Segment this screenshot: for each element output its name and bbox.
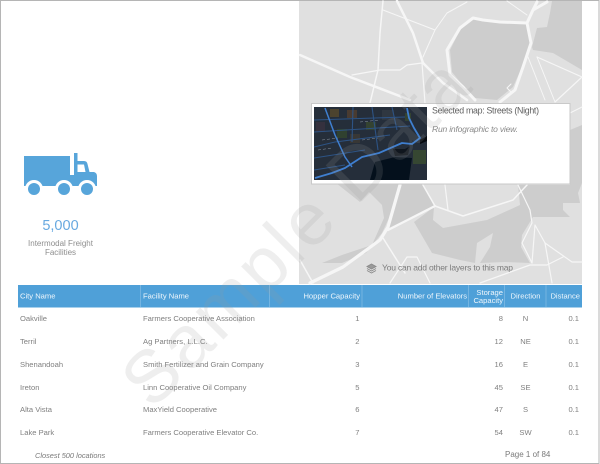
map background — [299, 1, 582, 284]
table row: Alta Vista: MaxYield Cooperative — [143, 405, 217, 414]
table row: Lake Park: Farmers Cooperative Elevator Co. — [143, 428, 258, 437]
stat label: Facilities — [45, 248, 76, 257]
table row: Ireton — [20, 383, 579, 392]
table row: Alta Vista: S — [523, 405, 528, 414]
table row: Ireton: SE — [520, 383, 531, 392]
table row: Oakville: Farmers Cooperative Association — [143, 314, 255, 323]
table row: Alta Vista: 47 — [495, 405, 503, 414]
table header: Facility Name — [143, 292, 189, 300]
stat value: 5,000 — [42, 218, 79, 234]
table row: Oakville: 8 — [499, 314, 503, 323]
table row: Alta Vista: Alta Vista — [20, 405, 53, 414]
table header: Distance — [550, 292, 580, 300]
table row: Lake Park — [20, 428, 579, 437]
selected map card: Selected map: Streets (Night) — [432, 106, 539, 116]
table row: Terril: Ag Partners, L.L.C. — [143, 337, 208, 346]
table row: Shenandoah: 3 — [355, 360, 360, 369]
table row: Oakville: Oakville — [20, 314, 47, 323]
table row: Shenandoah: 16 — [495, 360, 503, 369]
table row: Ireton: Ireton — [20, 383, 39, 392]
table row: Terril — [20, 337, 579, 346]
icon: truck — [24, 153, 97, 198]
table row: Shenandoah: E — [523, 360, 528, 369]
table row: Terril: 0.1 — [568, 337, 579, 346]
table row: Terril: 2 — [355, 337, 360, 346]
table row: Terril: 12 — [495, 337, 503, 346]
table row: Terril: NE — [520, 337, 531, 346]
table row: Ireton: 45 — [495, 383, 503, 392]
table row: Ireton: 5 — [355, 383, 360, 392]
selected map card — [312, 104, 570, 184]
watermark: Sample Data — [105, 41, 486, 422]
map layers note: You can add other layers to this map — [382, 262, 513, 272]
selected map card: Run infographic to view. — [432, 124, 518, 134]
table row: Oakville: N — [523, 314, 528, 323]
table header: Hopper Capacity — [303, 292, 360, 300]
map thumbnail — [314, 107, 427, 180]
table row: Alta Vista: 0.1 — [568, 405, 579, 414]
table row: Lake Park: Lake Park — [20, 428, 54, 437]
table header — [18, 285, 582, 308]
table row: Lake Park: 7 — [355, 428, 360, 437]
table footer note: Closest 500 locations — [35, 451, 106, 460]
table row: Oakville: 1 — [355, 314, 360, 323]
table row: Alta Vista: 6 — [355, 405, 360, 414]
table row: Oakville: 0.1 — [568, 314, 579, 323]
table row: Terril: Terril — [20, 337, 37, 346]
table row: Lake Park: 54 — [495, 428, 503, 437]
table header: Direction — [511, 292, 540, 300]
table header: City Name — [20, 292, 55, 300]
pagination: Page 1 of 84 — [505, 450, 551, 459]
table row: Shenandoah — [20, 360, 579, 369]
table row: Shenandoah: 0.1 — [568, 360, 579, 369]
table header: Number of Elevators — [398, 292, 467, 300]
table row: Ireton: 0.1 — [568, 383, 579, 392]
table header: Storage — [476, 288, 503, 297]
table row: Lake Park: 0.1 — [568, 428, 579, 437]
table row: Shenandoah: Smith Fertilizer and Grain Company — [143, 360, 264, 369]
table header: Capacity — [473, 296, 503, 305]
table row: Ireton: Linn Cooperative Oil Company — [143, 383, 247, 392]
table row: Shenandoah: Shenandoah — [20, 360, 63, 369]
stat label: Intermodal Freight — [28, 239, 94, 248]
table row: Lake Park: SW — [519, 428, 532, 437]
table row: Oakville — [20, 314, 579, 323]
table row: Alta Vista — [20, 405, 579, 414]
